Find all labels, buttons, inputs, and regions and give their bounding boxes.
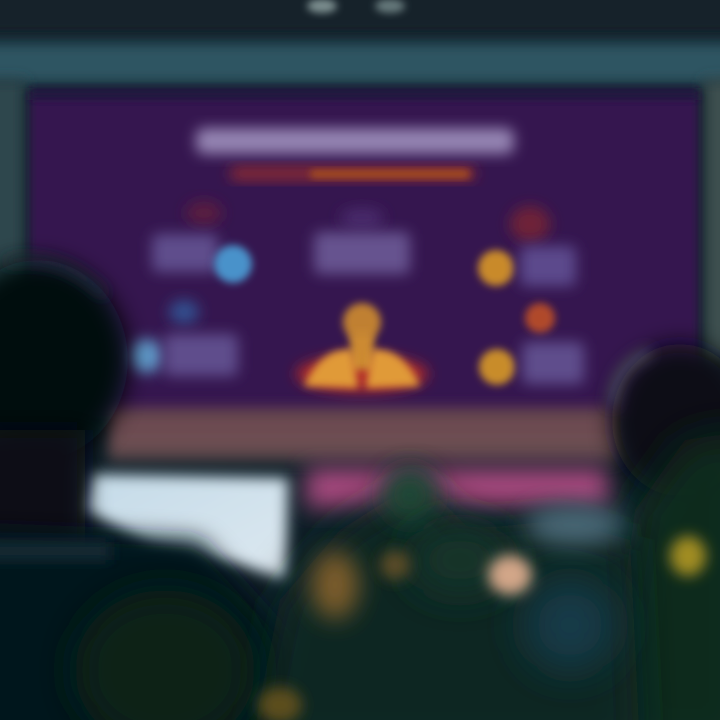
pink lower band [306,468,608,508]
stage ledge [108,408,620,464]
foreground plants [75,467,640,720]
item: top left [152,201,252,283]
ceiling and wall [0,0,720,360]
right audience head silhouette [612,344,720,720]
bright white laptop screen [84,474,288,580]
item: bottom left [129,300,238,376]
item: bottom right [479,303,584,385]
left audience head silhouette [0,259,290,720]
item: top right [478,206,576,286]
item: central highlighted hands icon [296,303,428,392]
item: top centre [314,208,410,274]
screen title [196,128,514,180]
projection screen panel [30,88,698,416]
flowers and highlights [258,536,706,720]
